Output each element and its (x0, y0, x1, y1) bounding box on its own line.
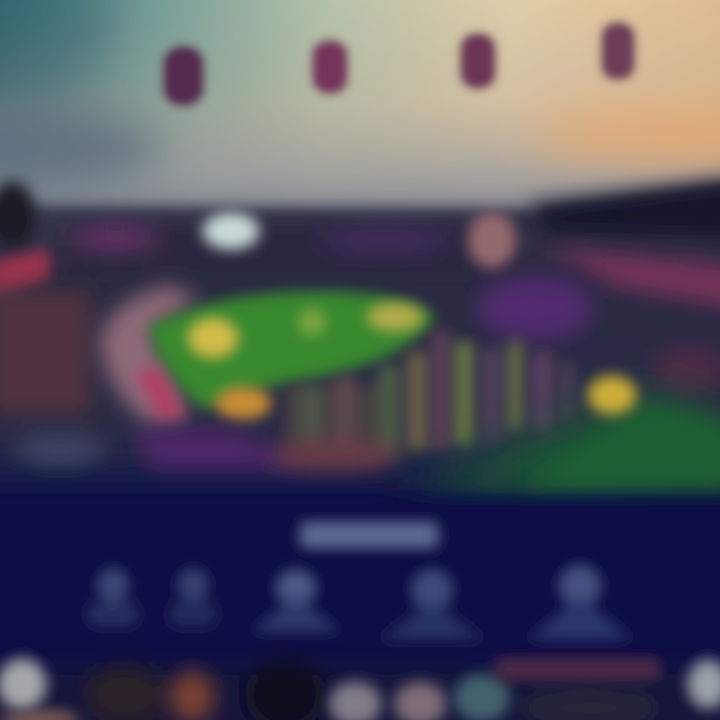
pale figures (329, 682, 381, 720)
upper stand band (70, 225, 520, 270)
yellow patch top right (367, 303, 423, 331)
dark figure (245, 659, 325, 720)
crowd head left (0, 659, 46, 709)
playing field (15, 285, 720, 495)
crowd head right (688, 660, 720, 708)
lantern 2 (312, 40, 348, 94)
maroon band (495, 658, 660, 680)
hanging lanterns (163, 22, 635, 106)
lantern 4 (601, 22, 635, 80)
dark tower left (0, 181, 36, 249)
purple stand (477, 276, 593, 340)
pink stand left (0, 248, 50, 300)
yellow patch right (588, 376, 636, 414)
navy lower panel (0, 498, 720, 663)
pink edge (135, 368, 185, 420)
right green field (400, 395, 720, 495)
purple foreground edge (135, 430, 320, 468)
pale field rim (100, 285, 200, 425)
icon 2 (170, 568, 216, 626)
icon 3 (250, 569, 342, 632)
floodlight glow (203, 213, 259, 249)
lantern 3 (460, 33, 496, 89)
orange patch lower (215, 387, 271, 419)
stadium stands and horizon (0, 178, 720, 505)
heading bar (300, 522, 438, 548)
icon 1 (88, 568, 138, 626)
icon 5 (527, 565, 633, 640)
yellow patch left (188, 318, 238, 358)
brown stand left (0, 290, 90, 415)
icon 4 (380, 569, 484, 640)
main green field (150, 292, 435, 410)
city columns (285, 330, 574, 460)
brown figures (85, 665, 165, 720)
lantern 1 (163, 46, 204, 106)
sky (0, 0, 720, 220)
bottom crowd row (0, 658, 720, 720)
tan block (468, 212, 516, 268)
dark treeline right (530, 180, 720, 240)
pink stand right (545, 248, 720, 308)
